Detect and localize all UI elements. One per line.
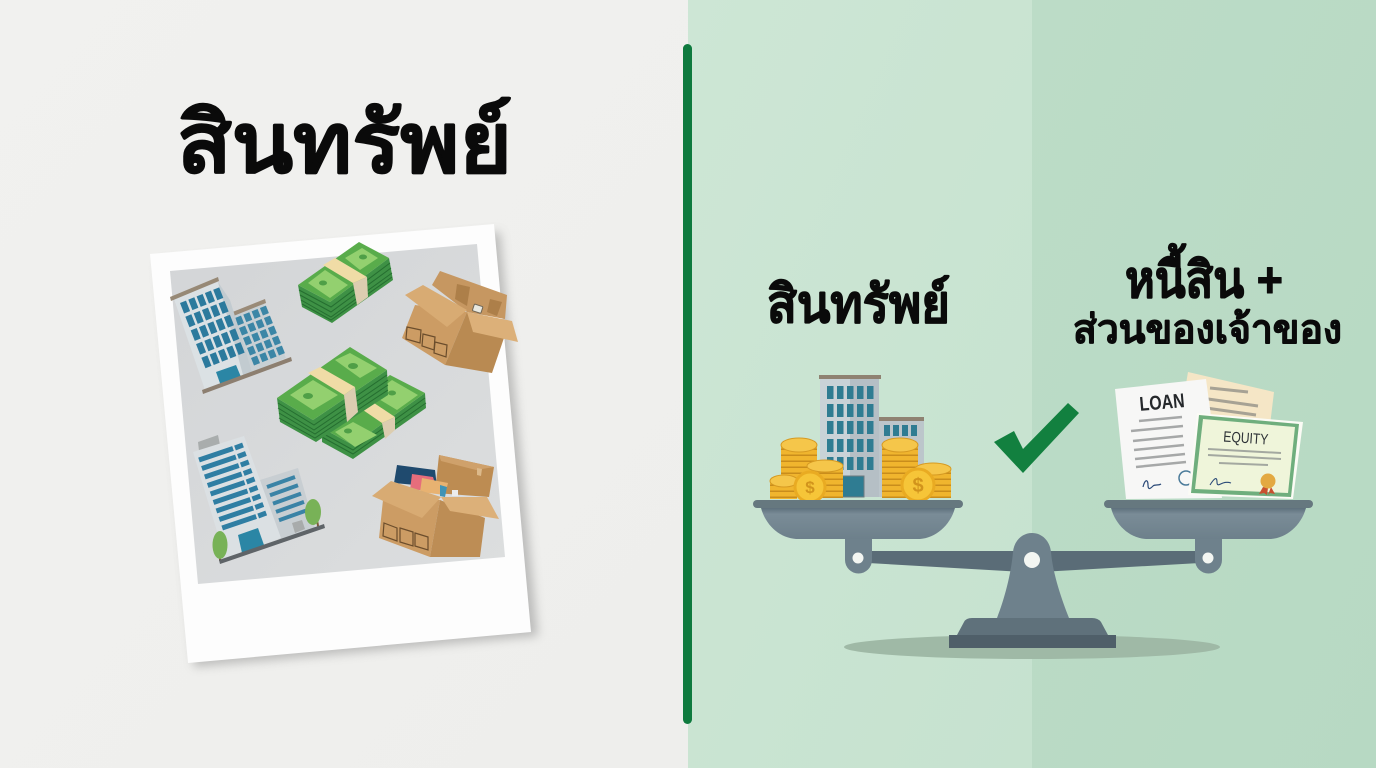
right hanger: [1195, 538, 1222, 574]
icon: office building bottom left: [193, 435, 325, 564]
right panel background: liabilities and equity column: [1032, 0, 1376, 768]
icon: green check mark: [994, 403, 1079, 473]
central post: [997, 533, 1069, 618]
polaroid frame: [150, 224, 531, 663]
vertical green divider: [683, 44, 692, 724]
left panel background: [0, 0, 688, 768]
icon: office building top left: [170, 277, 292, 394]
icon: open cardboard box top right: [402, 271, 518, 373]
icon: balance scale: [753, 500, 1313, 648]
icon: building with coin stacks: [770, 375, 951, 502]
coin stacks: [770, 438, 951, 502]
base lower step: [949, 635, 1116, 648]
coin stacks: $: [912, 475, 924, 497]
loan document: LOAN: [1139, 390, 1185, 416]
left hanger: [845, 538, 872, 573]
left pan: [753, 500, 963, 539]
icon: banknote stack top: [298, 242, 393, 323]
equity certificate: EQUITY: [1223, 428, 1269, 449]
title: assets: สินทรัพย์: [177, 96, 512, 190]
beige document: [1180, 372, 1274, 425]
photo area: [170, 244, 505, 584]
base upper step: [957, 618, 1108, 635]
tall building: [819, 375, 881, 497]
shadow under scale: [844, 635, 1220, 659]
icon: banknote stacks centre: [277, 347, 426, 459]
icon: open cardboard box with books: [372, 455, 499, 557]
polaroid photo of assets: [150, 224, 538, 667]
loan document: [1115, 379, 1222, 499]
label: liabilities plus: หนี้สิน +: [1125, 243, 1283, 308]
beam: [868, 551, 1200, 572]
right hanger pin: [1202, 552, 1214, 564]
label: assets: สินทรัพย์: [767, 275, 950, 334]
pivot pin: [1024, 552, 1040, 568]
left hanger pin: [852, 552, 864, 564]
middle panel background: assets column: [688, 0, 1032, 768]
icon: loan and equity documents: [1115, 372, 1303, 499]
label: owners equity: ส่วนของเจ้าของ: [1073, 308, 1342, 352]
right pan: [1104, 500, 1313, 539]
coin stacks: $: [805, 478, 815, 497]
equity certificate: [1188, 413, 1303, 499]
polaroid shadow: [158, 232, 538, 667]
small building: [879, 417, 924, 497]
